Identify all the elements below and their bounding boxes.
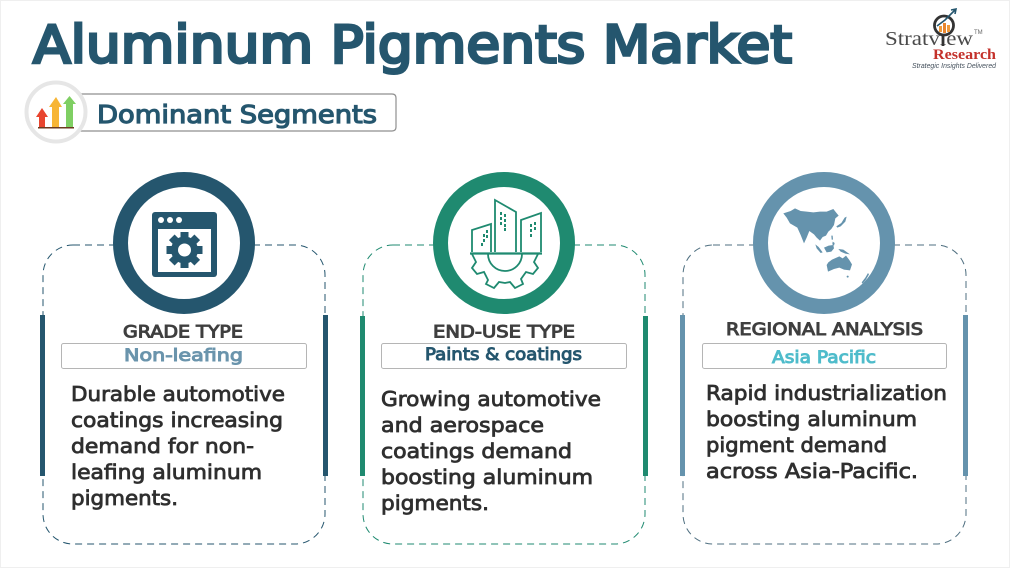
side bars xyxy=(680,315,968,476)
icon ring xyxy=(440,180,568,306)
panel: regional analysis xyxy=(680,180,968,544)
icon ring xyxy=(120,180,248,306)
logo: Stratview Research: TM xyxy=(974,30,983,36)
body text: pigment demand xyxy=(706,433,887,457)
body text: coatings demand xyxy=(381,439,572,463)
body text: boosting aluminum xyxy=(706,407,917,431)
body text: demand for non- xyxy=(71,434,254,458)
selected segment box xyxy=(382,344,626,368)
body text xyxy=(706,381,947,483)
icon: browser window with gear xyxy=(152,212,217,277)
logo: Stratview Research: Strategic Insights Delivered xyxy=(912,61,997,70)
body text: Rapid industrialization xyxy=(706,381,947,405)
logo: Stratview Research: Stratview xyxy=(885,29,973,50)
body text: Growing automotive xyxy=(381,387,601,411)
body text: pigments. xyxy=(381,491,489,515)
selected segment box: Paints & coatings xyxy=(425,345,582,365)
panel: end-use type xyxy=(360,180,648,544)
body text: Durable automotive xyxy=(71,382,285,406)
body text: pigments. xyxy=(71,486,178,510)
selected segment box: Asia Pacific xyxy=(772,348,876,368)
selected segment box xyxy=(702,344,946,368)
label: grade type: GRADE TYPE xyxy=(123,322,243,342)
body text xyxy=(71,382,285,510)
body text: coatings increasing xyxy=(71,408,283,432)
title: Aluminum Pigments Market xyxy=(33,16,792,76)
side bars xyxy=(40,315,328,476)
panel: grade type xyxy=(40,180,328,544)
side bars xyxy=(360,316,648,476)
logo: Stratview Research: Research xyxy=(933,47,996,63)
label: end-use type: END-USE TYPE xyxy=(433,322,575,342)
body text xyxy=(381,387,601,515)
selected segment box xyxy=(62,344,306,368)
body text: and aerospace xyxy=(381,413,544,437)
icon ring xyxy=(760,180,888,306)
icon: buildings on gear xyxy=(470,200,542,288)
heading: Dominant Segments xyxy=(26,82,396,142)
heading: Dominant Segments: Dominant Segments xyxy=(97,100,377,129)
body text: across Asia-Pacific. xyxy=(706,459,918,483)
selected segment box: Non-leafing xyxy=(124,346,243,366)
logo: Stratview Research xyxy=(885,9,997,70)
icon: rising arrows xyxy=(36,96,76,128)
icon: Asia Pacific map xyxy=(783,208,869,284)
body text: boosting aluminum xyxy=(381,465,593,489)
icon: magnifier with chart xyxy=(934,9,956,46)
label: regional analysis: REGIONAL ANALYSIS xyxy=(726,320,923,340)
body text: leafing aluminum xyxy=(71,460,262,484)
